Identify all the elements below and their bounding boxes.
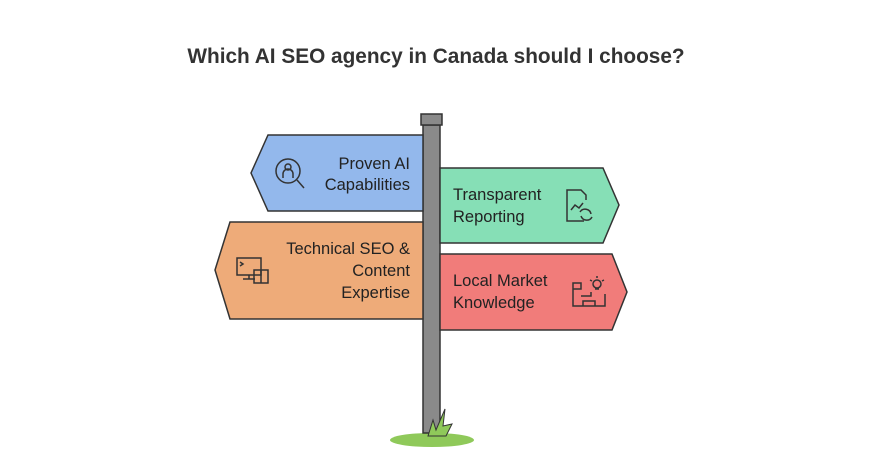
sign: Technical SEO & Content Expertise: Technical SEO & [286, 240, 410, 258]
sign: Proven AI Capabilities [251, 135, 423, 211]
sign: Proven AI Capabilities: Capabilities [325, 176, 410, 194]
sign: Transparent Reporting [440, 168, 619, 243]
sign: Transparent Reporting: Transparent [453, 186, 542, 204]
pole [421, 114, 442, 433]
sign: Local Market Knowledge: Knowledge [453, 294, 535, 312]
sign: Technical SEO & Content Expertise: Expertise [341, 284, 410, 302]
ground [390, 433, 474, 447]
title: Which AI SEO agency in Canada should I choose? [187, 45, 685, 68]
sign: Local Market Knowledge [440, 254, 627, 330]
grass tuft [428, 409, 452, 436]
sign: Proven AI Capabilities: Proven AI [338, 155, 410, 173]
sign: Local Market Knowledge: Local Market [453, 272, 548, 290]
icon: monitor and book [237, 258, 268, 283]
sign: Transparent Reporting: Reporting [453, 208, 525, 226]
icon: report refresh [567, 190, 592, 221]
sign: Technical SEO & Content Expertise [215, 222, 423, 319]
icon: map with bulb [573, 276, 605, 306]
sign: Technical SEO & Content Expertise: Content [352, 262, 410, 280]
icon: AI search [276, 159, 304, 188]
